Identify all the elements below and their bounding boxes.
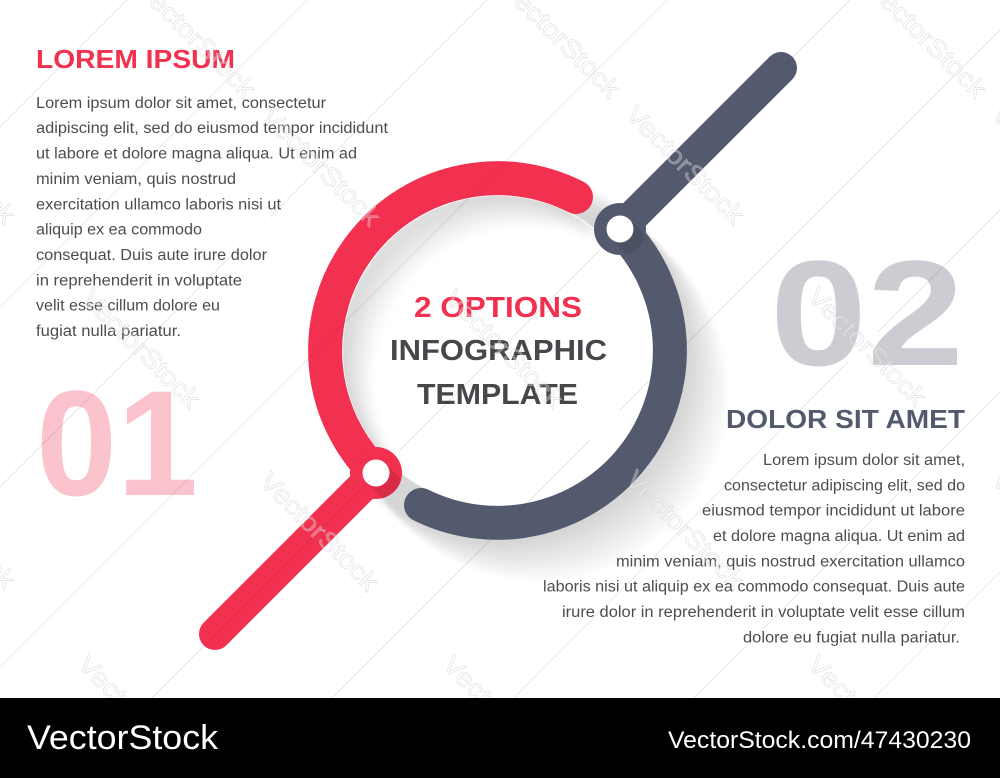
watermark text: VectorStock (439, 283, 570, 415)
text block: left: aliquip ex ea commodo (36, 222, 202, 239)
text block: right: consectetur adipiscing elit, sed do (724, 477, 965, 494)
watermark text: VectorStock (437, 649, 568, 778)
text block: left: exercitation ullamco laboris nisi ut (36, 196, 282, 213)
numeral 02: 02 (770, 229, 964, 397)
watermark text: VectorStock (76, 283, 207, 415)
watermark text: VectorStock (802, 649, 933, 778)
footer bar (0, 698, 1000, 778)
text block: left (36, 95, 389, 340)
center circle with inner shadow (328, 181, 654, 507)
watermark text: VectorStock (802, 281, 933, 413)
text block: right: minim veniam, quis nostrud exercitation ullamco (616, 553, 965, 570)
text block: left: adipiscing elit, sed do eiusmod tempor incididunt (36, 120, 389, 137)
footer brand: VectorStock (27, 719, 219, 757)
text block: left: velit esse cillum dolore eu (36, 298, 220, 315)
text block: left: Lorem ipsum dolor sit amet, consectetur (36, 95, 326, 112)
watermark text: VectorStock (620, 99, 751, 231)
text block: right: Lorem ipsum dolor sit amet, (763, 452, 965, 469)
watermark text: VectorStock (254, 466, 385, 598)
text block: left: in reprehenderit in voluptate (36, 272, 242, 289)
center title: INFOGRAPHIC (390, 335, 607, 367)
text block: left: ut labore et dolore magna aliqua. Ut enim ad (36, 146, 357, 163)
text block: right: et dolore magna aliqua. Ut enim ad (713, 528, 965, 545)
heading: lorem ipsum: LOREM IPSUM (36, 44, 235, 74)
center title: 2 OPTIONS (414, 292, 582, 324)
text block: right (543, 452, 965, 646)
text block: right: laboris nisi ut aliquip ex ea commodo consequat. Duis aute (543, 579, 965, 596)
numeral 01: 01 (36, 359, 198, 527)
watermark text: VectorStock (72, 649, 203, 778)
watermark text: VectorStock (620, 464, 751, 596)
text block: left: consequat. Duis aute irure dolor (36, 247, 267, 264)
heading: dolor sit amet: DOLOR SIT AMET (726, 404, 965, 434)
red node (350, 447, 402, 499)
footer image id: VectorStock.com/47430230 (668, 727, 971, 754)
dark node (594, 203, 646, 255)
text block: right: dolore eu fugiat nulla pariatur. (743, 629, 960, 646)
text block: left: fugiat nulla pariatur. (36, 323, 181, 340)
long shadow of ring (313, 166, 727, 580)
dark arc and arm (421, 68, 781, 523)
watermark text: VectorStock (256, 101, 387, 233)
red arc and arm (215, 178, 576, 634)
text block: left: minim veniam, quis nostrud (36, 171, 236, 188)
center title: TEMPLATE (417, 379, 578, 411)
center title (390, 292, 607, 411)
text block: right: irure dolor in reprehenderit in voluptate velit esse cillum (562, 604, 965, 621)
text block: right: eiusmod tempor incididunt ut labore (702, 503, 965, 520)
